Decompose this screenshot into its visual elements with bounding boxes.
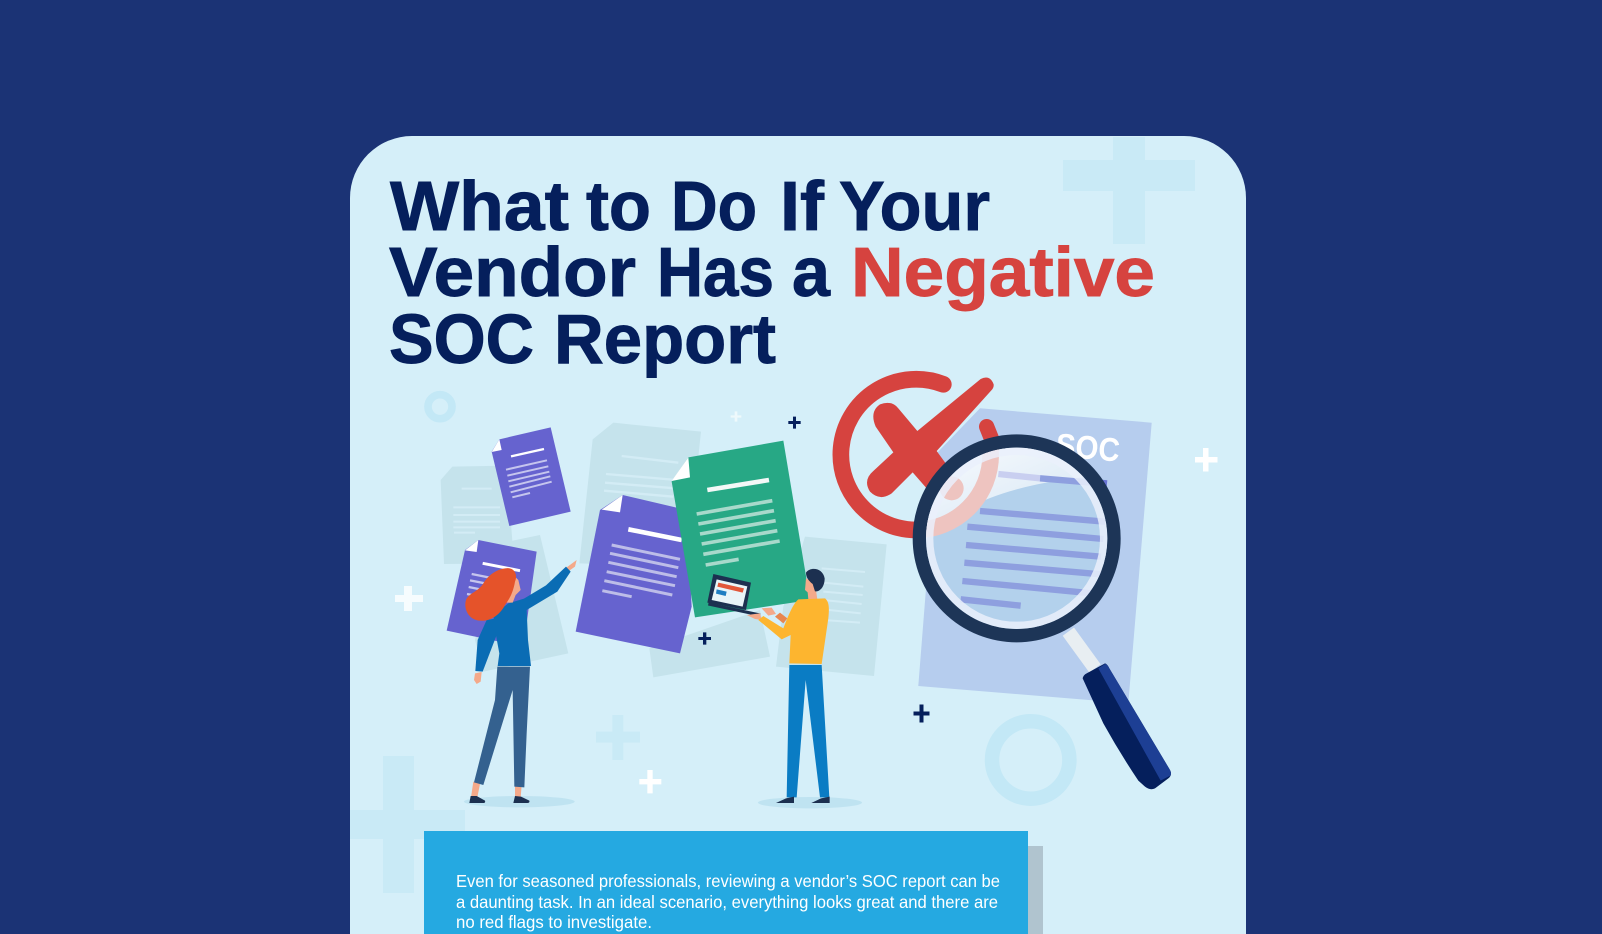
title: If (780, 167, 825, 245)
plus: navy top (788, 417, 801, 429)
document: small purple top (492, 427, 571, 526)
faded document: far left (441, 466, 514, 564)
plus: navy lower (698, 632, 711, 645)
icon: laptop (707, 574, 760, 615)
illustration: documents and legs (428, 395, 887, 808)
decoration: large ring (992, 721, 1069, 799)
plus: white left (395, 586, 423, 611)
faded document: behind woman (475, 535, 568, 672)
title: Do (671, 167, 757, 245)
faded document: behind man (776, 537, 887, 676)
document: large purple (576, 495, 692, 653)
woman legs (469, 667, 530, 803)
plus: white bottom (639, 770, 661, 793)
decoration: pale plus (596, 715, 640, 760)
background decoration shapes (350, 137, 1195, 893)
intro text: a daunting task. In an ideal scenario, everything looks great and there are (456, 892, 998, 912)
magnifier lens (912, 434, 1121, 642)
title: Report (554, 300, 776, 378)
plus: white right (1195, 448, 1218, 472)
infographic canvas (350, 136, 1246, 934)
man legs (776, 665, 830, 803)
title: a (792, 233, 831, 311)
SOC document (918, 408, 1152, 703)
title (389, 167, 1155, 378)
intro box shadow (1028, 846, 1043, 934)
plus: navy (914, 704, 930, 722)
decoration: small ring (428, 395, 452, 419)
title: Has (657, 233, 774, 311)
figure: man upper body (747, 569, 829, 664)
magnifier handle (1068, 632, 1171, 789)
report line outside lens (1070, 480, 1107, 484)
document: purple lower left (447, 540, 537, 647)
red rejected mark (841, 378, 994, 530)
title: SOC (389, 300, 534, 378)
intro text: Even for seasoned professionals, reviewing a vendor’s SOC report can be (456, 871, 1000, 891)
intro box (424, 831, 1028, 934)
title: to (586, 167, 651, 245)
title: Vendor (389, 233, 636, 311)
intro text (456, 871, 1000, 932)
SOC label: SOC (1054, 426, 1121, 469)
shadows under people (464, 796, 862, 808)
faded document: center back (579, 423, 701, 567)
figure: woman upper body (465, 560, 577, 684)
intro text: no red flags to investigate. (456, 912, 652, 932)
document: large green (672, 441, 810, 617)
faded document: lower center (649, 610, 770, 677)
panel: card (350, 136, 1246, 934)
title: Your (839, 167, 990, 245)
title: Negative (851, 233, 1155, 311)
plus: white small (731, 411, 741, 422)
title: What (390, 167, 569, 245)
